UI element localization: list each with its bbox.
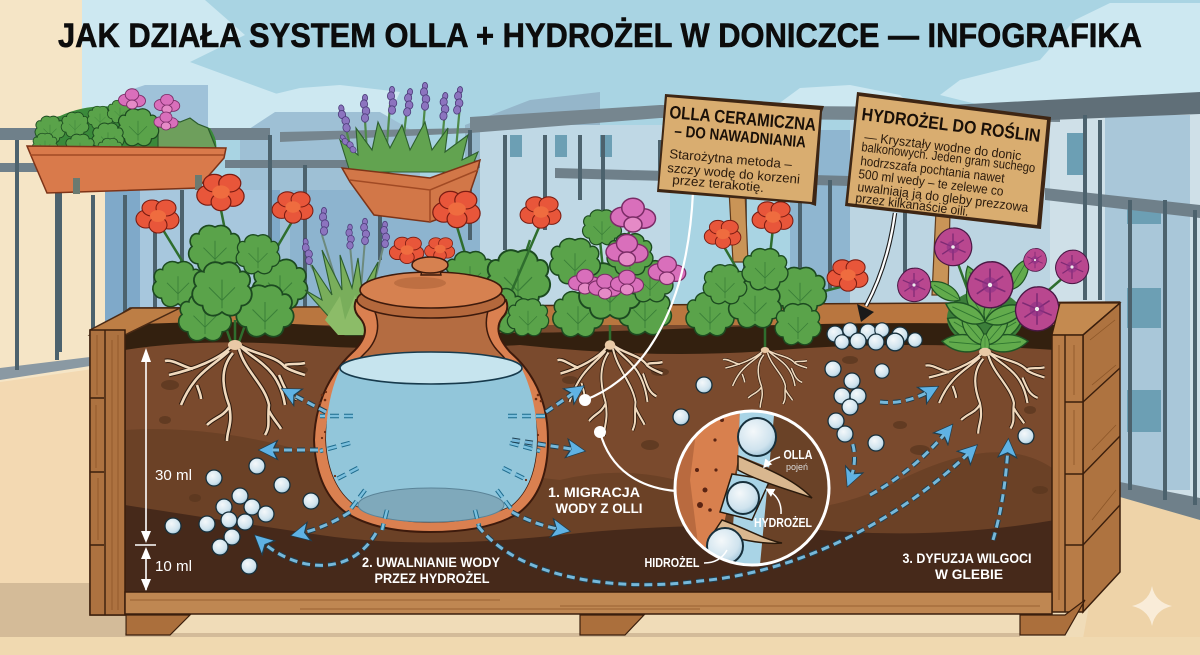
right cluster <box>825 361 1034 451</box>
step label 1: WODY Z OLLI <box>556 500 642 516</box>
step label 2 <box>362 554 501 586</box>
background: sky <box>0 0 1200 520</box>
lavender <box>336 82 478 172</box>
sign: olla ceramiczna: szczy wodę do korzeni <box>667 160 801 187</box>
water surface <box>340 352 522 384</box>
sign: hydrożel do roślin: — Kryształy wodne do donic <box>864 129 1023 163</box>
step label 1: 1. MIGRACJA <box>548 484 640 500</box>
plant 3: red geranium behind olla <box>389 191 550 336</box>
depth scale <box>135 348 192 591</box>
sign: hydrożel do roślin: HYDROŻEL DO ROŚLIN <box>861 103 1042 146</box>
sign: olla ceramiczna: Starożytna metoda – <box>669 146 793 172</box>
sign: olla ceramiczna: – DO NAWADNIANIA <box>674 123 807 152</box>
plant 1: red geranium <box>136 174 313 345</box>
railing <box>0 92 1200 520</box>
roots <box>165 340 1044 441</box>
plants in left planter <box>32 89 216 161</box>
sign: olla ceramiczna <box>657 94 824 206</box>
magnifier labels: HIDROŻEL <box>644 555 700 570</box>
step label 3: 3. DYFUZJA WILGOCI <box>902 550 1032 566</box>
olla inside <box>326 305 537 522</box>
planter feet <box>126 600 1085 635</box>
step label 2: 2. UWALNIANIE WODY <box>362 554 501 570</box>
sign: hydrożel do roślin: przez kilkanaście oili. <box>855 190 970 219</box>
wall pores <box>319 391 542 481</box>
magnifier labels: pojeń <box>786 462 808 472</box>
blue arrows <box>260 390 1008 585</box>
buildings <box>105 85 1200 500</box>
magnifier labels: HYDROŻEL <box>754 515 812 530</box>
planter right side <box>1052 303 1120 612</box>
olla <box>314 257 548 532</box>
magnifier leader lines <box>704 457 781 563</box>
plant 6: purple petunia <box>898 228 1089 355</box>
magnifier labels <box>644 447 813 570</box>
sign: hydrożel do roślin <box>845 92 1051 229</box>
planter left post <box>90 308 180 615</box>
step label 3 <box>902 550 1032 582</box>
left cluster <box>165 458 319 574</box>
planter soil <box>125 322 1055 592</box>
water <box>326 369 537 522</box>
balcony planter centre with lavender <box>336 82 480 222</box>
magnifier labels: OLLA <box>784 447 813 462</box>
sign: hydrożel do roślin: hodrzszafa pochtania nawet <box>860 153 1006 186</box>
step label 1 <box>548 484 642 516</box>
hydrogel beads <box>165 323 1034 574</box>
depth scale: 30 ml <box>155 467 192 484</box>
plant 5: red geranium right <box>686 202 868 350</box>
clouds <box>80 0 1200 135</box>
planter bottom beam <box>125 592 1052 614</box>
plant 4: pink geranium <box>512 197 686 345</box>
balcony planter left <box>27 89 226 194</box>
sign: hydrożel do roślin: balkonowych. Jeden gram suchego <box>861 139 1036 175</box>
sign: hydrożel do roślin: uwalniają ją do gleby prezzowa <box>857 179 1030 215</box>
water pores dashes in olla <box>320 416 545 530</box>
sparkle icon <box>1132 586 1172 626</box>
water bottom <box>358 488 504 522</box>
sign posts <box>729 190 950 295</box>
magnified detail circle <box>644 400 829 570</box>
step label 3: W GLEBIE <box>935 566 1003 582</box>
wall left <box>0 0 105 385</box>
plant 2: lavender clump <box>301 207 392 335</box>
planter back wall <box>90 302 1120 335</box>
depth scale: 10 ml <box>155 558 192 575</box>
scattered beads <box>673 377 712 425</box>
olla body <box>314 300 548 532</box>
floor <box>0 368 1200 655</box>
step label 2: PRZEZ HYDROŻEL <box>374 570 490 586</box>
lid <box>357 282 505 318</box>
sign: olla ceramiczna: przez terakotię. <box>672 172 765 195</box>
sign: hydrożel do roślin: 500 ml wedy – te zelewe co <box>858 166 1004 199</box>
top pile of beads <box>827 323 922 351</box>
callout lines <box>579 192 895 491</box>
sign: olla ceramiczna: OLLA CERAMICZNA <box>669 102 817 135</box>
